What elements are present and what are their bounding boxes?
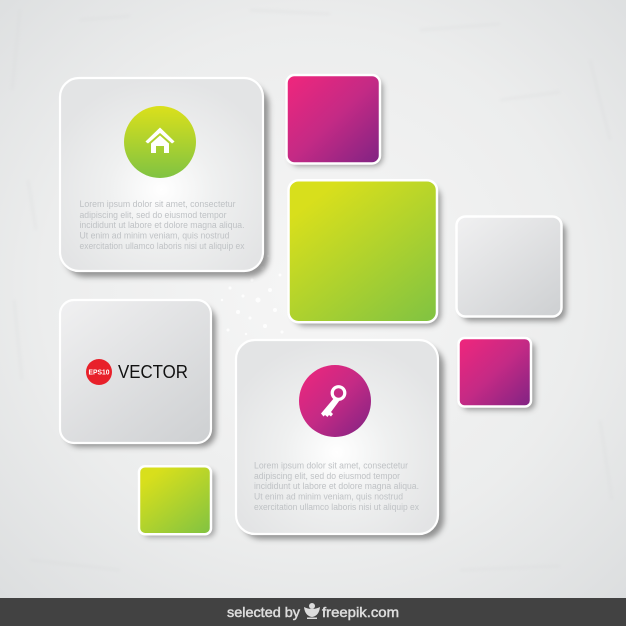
panel: small pink square right <box>458 338 535 410</box>
icon: freepik logo <box>304 603 320 619</box>
text: selected by: selected by <box>227 604 300 620</box>
panel: small green square <box>139 466 215 537</box>
panel: small gray square <box>456 216 566 321</box>
panel: small pink square top <box>286 75 383 166</box>
text: freepik.com: freepik.com <box>322 604 399 620</box>
icon: home in green circle <box>124 106 196 178</box>
text: VECTOR: VECTOR <box>118 361 188 382</box>
text block: lorem ipsum: adipiscing elit, sed do eiusmod tempor <box>254 471 400 481</box>
panel: text card with home icon <box>60 78 269 277</box>
panel: vector badge card <box>60 300 216 447</box>
text block: lorem ipsum: Lorem ipsum dolor sit amet, consectetur <box>254 460 408 470</box>
text block: lorem ipsum: incididunt ut labore et dolore magna aliqua. <box>80 220 244 230</box>
text block: lorem ipsum: Ut enim ad minim veniam, quis nostrud <box>80 230 230 240</box>
text block: lorem ipsum: exercitation ullamco laboris nisi ut aliquip ex <box>254 502 419 512</box>
footer bar <box>0 598 626 626</box>
icon: EPS10 red badge <box>86 359 112 385</box>
text block: lorem ipsum: Ut enim ad minim veniam, quis nostrud <box>254 492 403 502</box>
text block: lorem ipsum: Lorem ipsum dolor sit amet, consectetur <box>80 199 236 209</box>
icon: key in pink circle <box>299 365 371 437</box>
icon: EPS10 red badge: EPS10 <box>88 368 110 376</box>
panel: text card with key icon <box>236 340 444 539</box>
text block: lorem ipsum: adipiscing elit, sed do eiusmod tempor <box>80 210 226 220</box>
grunge splatter <box>221 255 284 335</box>
text block: lorem ipsum <box>80 199 245 251</box>
panel: large green square <box>288 180 441 326</box>
text block: lorem ipsum: incididunt ut labore et dolore magna aliqua. <box>254 481 419 491</box>
text block: lorem ipsum <box>254 460 419 512</box>
text block: lorem ipsum: exercitation ullamco laboris nisi ut aliquip ex <box>80 241 245 251</box>
